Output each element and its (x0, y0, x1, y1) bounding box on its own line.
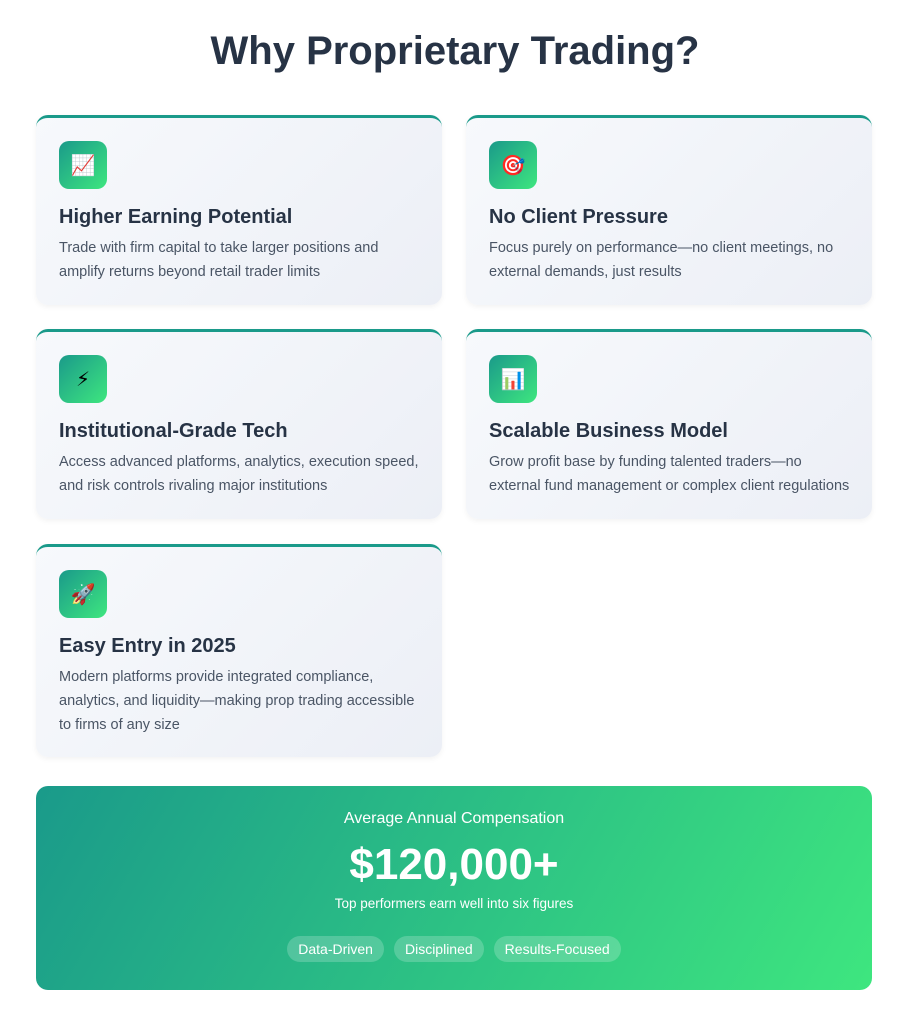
subtext: Top performers earn well into six figures (335, 896, 573, 911)
description: Focus purely on performance—no client meetings, no (489, 240, 833, 256)
icon: rocket (59, 570, 107, 618)
description: to firms of any size (59, 717, 180, 733)
card: easy entry in 2025 (36, 544, 442, 757)
big number: $120,000+ (349, 840, 559, 889)
icon: bar chart: 📊 (501, 367, 525, 391)
icon: lightning: ⚡ (76, 367, 90, 391)
title: Why Proprietary Trading? (211, 29, 699, 73)
description (489, 240, 833, 280)
pills (287, 936, 621, 962)
card: no client pressure (466, 115, 872, 305)
heading: Higher Earning Potential (59, 206, 292, 228)
heading: Easy Entry in 2025 (59, 635, 236, 657)
heading: No Client Pressure (489, 206, 668, 228)
description (59, 669, 414, 733)
icon: chart up: 📈 (71, 153, 95, 177)
icon: target: 🎯 (501, 153, 525, 177)
description: analytics, and liquidity—making prop trading accessible (59, 693, 414, 709)
banner label: Average Annual Compensation (344, 810, 564, 827)
description: external fund management or complex client regulations (489, 478, 849, 494)
pills: Data-Driven (298, 941, 373, 957)
icon: lightning (59, 355, 107, 403)
description (489, 454, 849, 494)
description: Access advanced platforms, analytics, execution speed, (59, 454, 418, 470)
icon: bar chart (489, 355, 537, 403)
description: Modern platforms provide integrated compliance, (59, 669, 373, 685)
pills: Results-Focused (505, 941, 610, 957)
description: Grow profit base by funding talented traders—no (489, 454, 802, 470)
description: amplify returns beyond retail trader limits (59, 264, 320, 280)
card: scalable business model (466, 329, 872, 519)
banner: compensation (36, 786, 872, 990)
icon: chart up (59, 141, 107, 189)
description: Trade with firm capital to take larger positions and (59, 240, 378, 256)
description (59, 454, 418, 494)
icon: target (489, 141, 537, 189)
description: and risk controls rivaling major institutions (59, 478, 327, 494)
description: external demands, just results (489, 264, 682, 280)
heading: Scalable Business Model (489, 420, 728, 442)
card: institutional-grade tech (36, 329, 442, 519)
description (59, 240, 378, 280)
pills: Disciplined (405, 941, 473, 957)
card: higher earning potential (36, 115, 442, 305)
icon: rocket: 🚀 (71, 582, 95, 606)
heading: Institutional-Grade Tech (59, 420, 288, 442)
